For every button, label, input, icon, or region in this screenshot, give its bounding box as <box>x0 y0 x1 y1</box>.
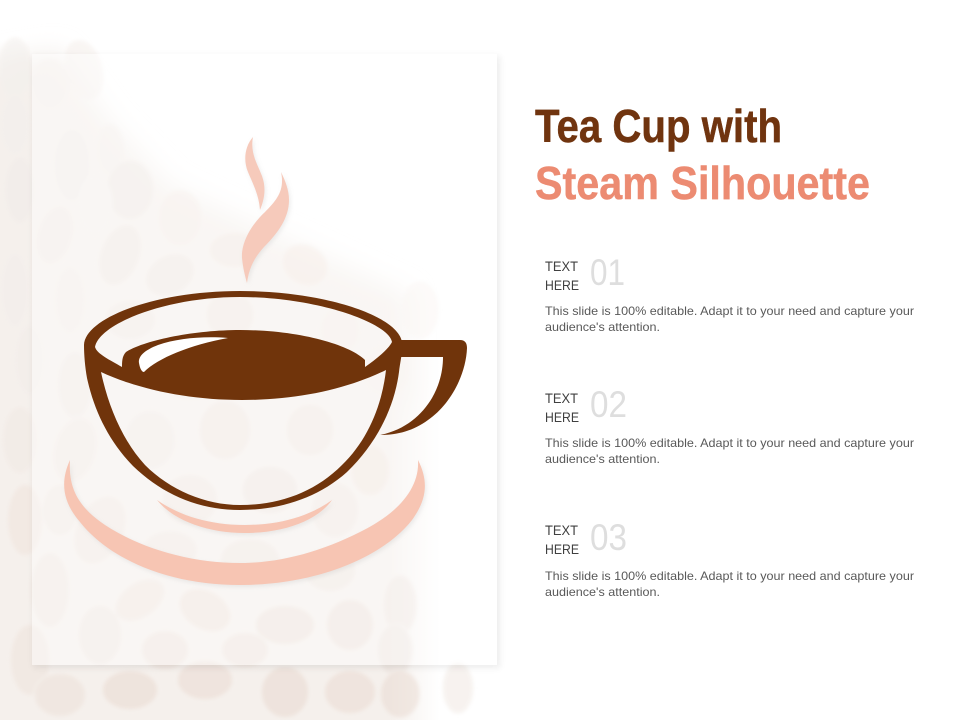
description: This slide is 100% editable. Adapt it to your need and capture your <box>545 436 914 450</box>
text block 03: HERE <box>545 541 579 557</box>
icon: steam wisps <box>242 137 289 283</box>
icon: cup body <box>84 291 402 510</box>
icon: liquid highlight <box>139 337 228 372</box>
icon: cup handle <box>380 340 467 435</box>
text block 03: audience's attention. <box>545 585 660 599</box>
text block 02: HERE <box>545 409 579 425</box>
panel: white card <box>32 54 500 668</box>
number: 01 <box>590 252 625 293</box>
label: TEXT <box>545 258 578 274</box>
number: 03 <box>590 517 627 558</box>
label: TEXT <box>545 522 578 538</box>
icon: cup foot shadow <box>157 500 332 533</box>
text block 02: audience's attention. <box>545 452 660 466</box>
icon: saucer <box>64 460 425 585</box>
text block 01 <box>545 252 914 334</box>
label: TEXT <box>545 390 578 406</box>
description: This slide is 100% editable. Adapt it to your need and capture your <box>545 304 914 318</box>
text block 01: HERE <box>545 277 579 293</box>
illustration: tea cup with steam <box>64 137 467 585</box>
description: This slide is 100% editable. Adapt it to your need and capture your <box>545 569 914 583</box>
text block 01: audience's attention. <box>545 320 660 334</box>
title line 1: Tea Cup with <box>535 100 782 152</box>
text block 03 <box>545 517 914 599</box>
text block 02 <box>545 384 914 466</box>
title <box>535 100 870 209</box>
title line 2: Steam Silhouette <box>535 157 870 209</box>
background: coffee beans <box>0 36 473 720</box>
number: 02 <box>590 384 627 425</box>
